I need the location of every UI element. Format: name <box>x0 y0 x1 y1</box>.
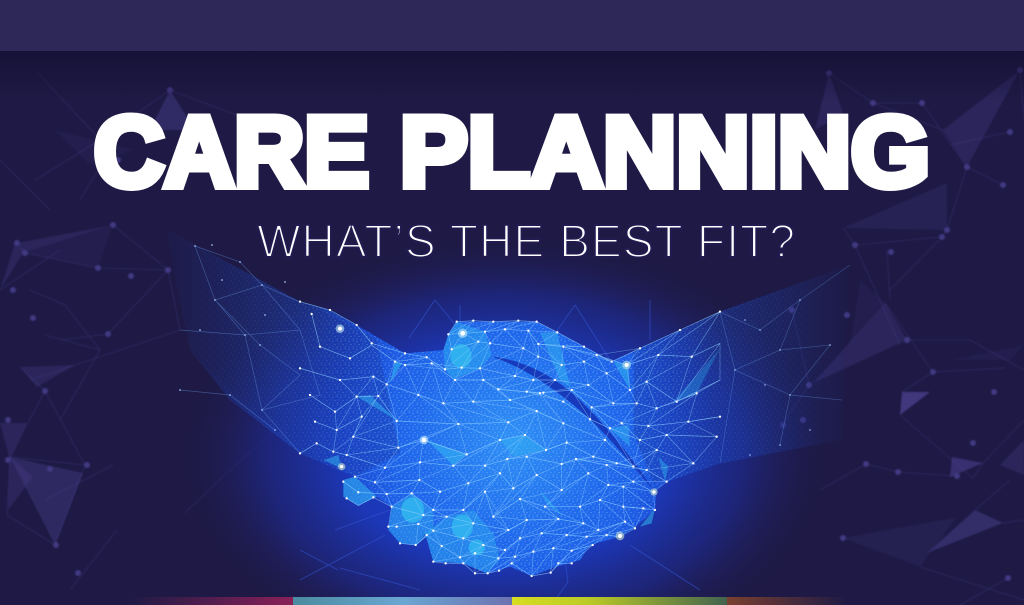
title: PLANNING <box>400 96 930 207</box>
network background: left <box>0 70 275 590</box>
icon: low-poly handshake <box>160 227 853 580</box>
glow lines around handshake <box>300 300 700 600</box>
handshake right arm <box>720 265 850 463</box>
sparkle highlights <box>336 324 658 540</box>
title: CARE <box>94 96 369 207</box>
blue glow behind handshake <box>180 240 830 605</box>
thumb and finger highlights <box>323 322 720 573</box>
speckle dots <box>198 248 813 574</box>
network background: right <box>782 70 1024 605</box>
top bar <box>0 0 1024 101</box>
subtitle: WHAT’S THE BEST FIT? <box>257 215 795 267</box>
bottom colour bar <box>130 597 847 605</box>
dark crease between hands <box>492 357 653 490</box>
mesh nodes <box>300 302 720 576</box>
handshake left arm <box>180 245 320 453</box>
mesh edges <box>300 302 720 576</box>
hand silhouette <box>180 237 832 576</box>
